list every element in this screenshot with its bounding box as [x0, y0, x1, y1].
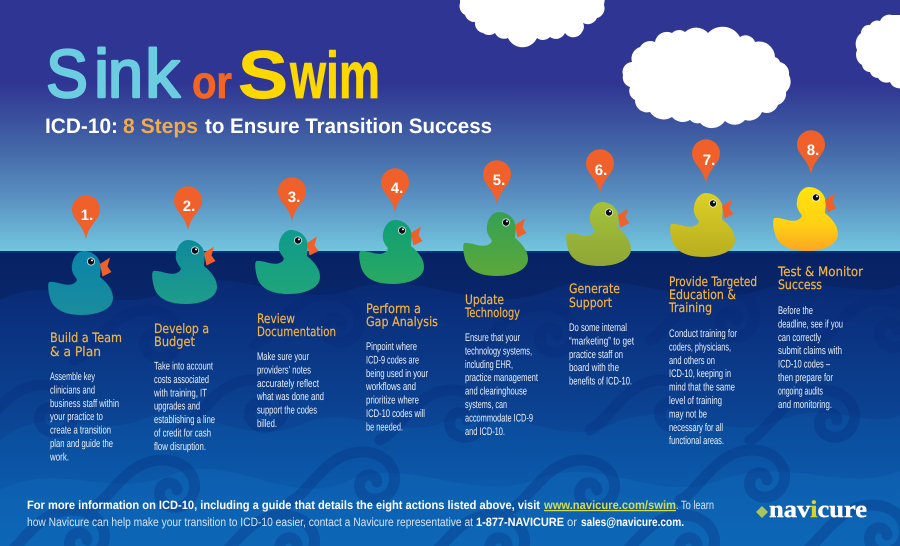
text 1: work. — [49, 451, 69, 463]
text 6: Do some internal — [569, 322, 627, 334]
heading 4: Gap Analysis — [366, 315, 438, 330]
step 6 — [566, 149, 634, 388]
duck 5 — [463, 212, 528, 276]
text 2: with training, IT — [153, 387, 207, 399]
text 6 — [569, 322, 634, 388]
title: Sink or Swim: n — [108, 36, 143, 112]
text 1: business staff within — [50, 398, 119, 410]
heading 5: Update — [465, 293, 504, 308]
footer text: . To learn — [676, 498, 714, 512]
sea background with waves — [0, 251, 900, 546]
heading 5 — [464, 293, 520, 321]
footer text: www.navicure.com/swim — [543, 498, 676, 512]
text 2 — [153, 360, 215, 453]
footer text: sales@navicure.com. — [581, 515, 684, 529]
text 3: accurately reflect — [257, 378, 319, 390]
heading 7: Training — [668, 301, 712, 316]
step 8 — [773, 130, 864, 411]
heading 7 — [668, 275, 757, 316]
footer text: or — [567, 515, 577, 529]
text 2: flow disruption. — [154, 441, 206, 453]
text 8: and monitoring. — [778, 399, 832, 411]
text 1: plan and guide the — [50, 438, 113, 450]
heading 4 — [366, 302, 438, 330]
step 7 — [668, 139, 757, 447]
duck 2 — [152, 240, 217, 304]
marker 4 — [381, 168, 409, 212]
text 8: deadline, see if you — [778, 318, 843, 330]
text 6: board with the — [569, 362, 619, 374]
text 4: being used in your — [366, 368, 428, 380]
text 1: Assemble key — [50, 371, 95, 383]
text 7: coders, physicians, — [669, 341, 731, 353]
text 8: then prepare for — [778, 372, 833, 384]
title: Sink or Swim: S — [238, 37, 288, 113]
heading 1: Build a Team — [50, 331, 122, 346]
subtitle: ICD-10: — [45, 115, 118, 138]
text 7: necessary for all — [669, 422, 723, 434]
text 5: systems, can — [465, 399, 507, 411]
heading 3 — [257, 312, 336, 340]
heading 8: Success — [778, 278, 822, 293]
step 3 — [255, 177, 336, 430]
marker 3 — [278, 177, 306, 221]
step 2 — [152, 186, 217, 453]
marker 1: 1. — [81, 207, 93, 224]
heading 2: Develop a — [154, 322, 209, 337]
text 3: what was done and — [256, 391, 324, 403]
marker 3: 3. — [288, 189, 300, 206]
text 2: establishing a line — [154, 414, 215, 426]
heading 7: Education & — [669, 288, 736, 303]
text 7 — [669, 328, 737, 447]
text 5: including EHR, — [465, 359, 513, 371]
marker 6: 6. — [595, 162, 607, 179]
text 7: mind that the same — [669, 382, 735, 394]
text 6: “marketing” to get — [569, 335, 634, 347]
heading 3: Documentation — [257, 325, 336, 340]
heading 6: Generate — [569, 282, 620, 297]
heading 3: Review — [257, 312, 295, 327]
marker 2: 2. — [183, 198, 195, 215]
text 4: workflows and — [365, 381, 416, 393]
text 1: clinicians and — [50, 384, 95, 396]
text 3: providers' notes — [257, 364, 311, 376]
text 7: Conduct training for — [669, 328, 737, 340]
text 2: upgrades and — [154, 401, 200, 413]
step 1 — [48, 195, 122, 463]
text 7: and others on — [669, 355, 715, 367]
text 5: accommodate ICD-9 — [465, 412, 533, 424]
text 6: practice staff on — [569, 349, 623, 361]
duck 1 — [48, 251, 113, 315]
text 8: ongoing audits — [778, 385, 823, 397]
heading 1: & a Plan — [50, 345, 101, 360]
heading 2: Budget — [154, 335, 195, 350]
marker 8 — [797, 130, 825, 174]
text 4: be needed. — [366, 421, 403, 433]
heading 6 — [569, 282, 620, 311]
text 5: and clearinghouse — [465, 386, 527, 398]
subtitle: 8 Steps — [123, 115, 198, 138]
subtitle: to Ensure Transition Success — [205, 115, 492, 138]
text 4 — [365, 341, 428, 433]
title: Sink or Swim: wim — [289, 38, 380, 112]
text 5 — [465, 332, 538, 438]
marker 2 — [174, 186, 202, 230]
text 2: Take into account — [154, 360, 213, 372]
heading 4: Perform a — [366, 302, 421, 317]
sky background — [0, 0, 900, 251]
text 8: submit claims with — [778, 345, 842, 357]
heading 7: Provide Targeted — [669, 275, 757, 290]
step 5 — [463, 160, 538, 438]
title: Sink or Swim: or — [192, 56, 232, 108]
footer text: 1-877-NAVICURE — [476, 515, 564, 529]
text 3: billed. — [257, 418, 277, 430]
marker 7 — [692, 139, 720, 183]
marker 1 — [72, 195, 100, 239]
heading 6: Support — [569, 296, 612, 311]
cloud: top centre — [460, 0, 605, 47]
marker 8: 8. — [807, 142, 819, 159]
logo: navicure: navicure — [769, 497, 867, 523]
text 4: Pinpoint where — [366, 341, 417, 353]
title: Sink or Swim: k — [145, 36, 181, 112]
text 5: practice management — [465, 372, 538, 384]
marker 5: 5. — [493, 172, 505, 189]
title: Sink or Swim — [46, 36, 380, 113]
title: Sink or Swim: i — [94, 36, 109, 112]
duck 8 — [773, 187, 838, 251]
text 8: Before the — [778, 305, 813, 317]
heading 8: Test & Monitor — [777, 265, 864, 280]
footer text — [27, 498, 714, 529]
duck 3 — [255, 230, 320, 294]
text 1: your practice to — [50, 411, 103, 423]
step 4 — [359, 168, 438, 433]
duck 4 — [359, 220, 424, 284]
marker 6 — [586, 149, 614, 193]
text 3: Make sure your — [257, 351, 309, 363]
text 8: ICD-10 codes – — [778, 359, 831, 371]
footer text: how Navicure can help make your transition to ICD-10 easier, contact a Navicure representative at — [27, 515, 474, 529]
text 3: support the codes — [257, 405, 317, 417]
text 7: functional areas. — [669, 435, 724, 447]
marker 7: 7. — [703, 152, 715, 169]
text 5: Ensure that your — [465, 332, 520, 344]
subtitle — [45, 115, 492, 138]
text 8: can correctly — [778, 332, 821, 344]
title: Sink or Swim: S — [46, 36, 88, 112]
text 4: ICD-9 codes are — [366, 354, 419, 366]
duck 7 — [670, 193, 735, 257]
duck 6 — [566, 202, 631, 266]
heading 8 — [777, 265, 864, 293]
text 1: create a transition — [50, 425, 111, 437]
cloud: far right edge — [856, 15, 900, 88]
cloud: large right — [623, 27, 791, 128]
text 7: level of training — [669, 395, 722, 407]
heading 5: Technology — [464, 306, 520, 321]
heading 1 — [50, 331, 122, 360]
marker 4: 4. — [391, 180, 403, 197]
text 2: costs associated — [154, 374, 209, 386]
text 1 — [49, 371, 119, 463]
footer text: For more information on ICD-10, including a guide that details the eight actions listed above, visit — [27, 498, 540, 512]
heading 2 — [154, 322, 209, 350]
text 6: benefits of ICD-10. — [569, 376, 632, 388]
text 4: ICD-10 codes will — [366, 408, 425, 420]
text 7: may not be — [669, 408, 707, 420]
text 2: of credit for cash — [154, 428, 211, 440]
text 7: ICD-10, keeping in — [669, 368, 731, 380]
marker 5 — [483, 160, 511, 204]
text 4: prioritize where — [366, 395, 419, 407]
text 8 — [778, 305, 843, 411]
text 3 — [256, 351, 324, 430]
text 5: and ICD-10. — [465, 426, 505, 438]
text 5: technology systems, — [465, 345, 532, 357]
